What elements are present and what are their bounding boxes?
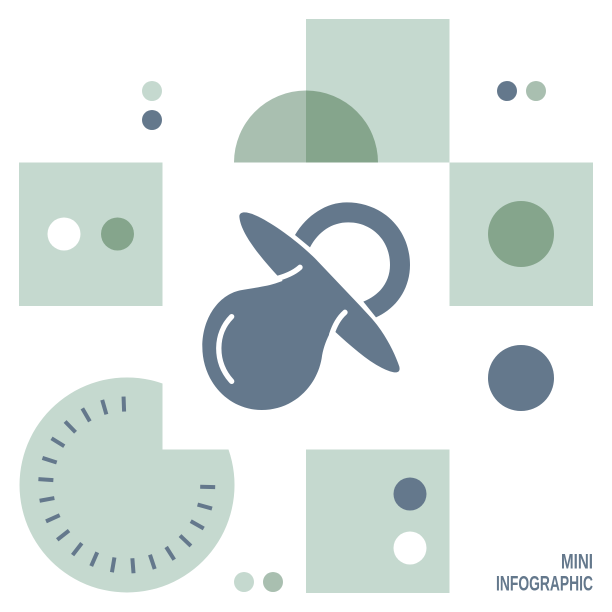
icon: dark circle	[488, 345, 554, 411]
panel: bottom square with two dots	[306, 450, 450, 593]
text: mini infographic label: MINI	[561, 550, 593, 574]
dial: notched circle with tick marks	[20, 377, 235, 592]
icon: pacifier	[202, 202, 410, 410]
small dots: bottom	[234, 572, 283, 592]
pacifier bulb	[202, 262, 347, 410]
panel: top square with semicircle	[234, 19, 450, 162]
pacifier ring handle	[295, 202, 410, 317]
pacifier shield separator lower	[332, 312, 345, 335]
small dots: top left	[142, 81, 162, 130]
panel: left square with two dots	[19, 162, 162, 306]
pacifier bulb highlight	[219, 317, 232, 381]
small dots: top right	[497, 81, 546, 101]
pacifier shield	[239, 212, 400, 372]
text: mini infographic label	[496, 550, 593, 596]
pacifier shield separator upper	[274, 267, 300, 279]
panel: right square with green circle	[450, 162, 593, 306]
